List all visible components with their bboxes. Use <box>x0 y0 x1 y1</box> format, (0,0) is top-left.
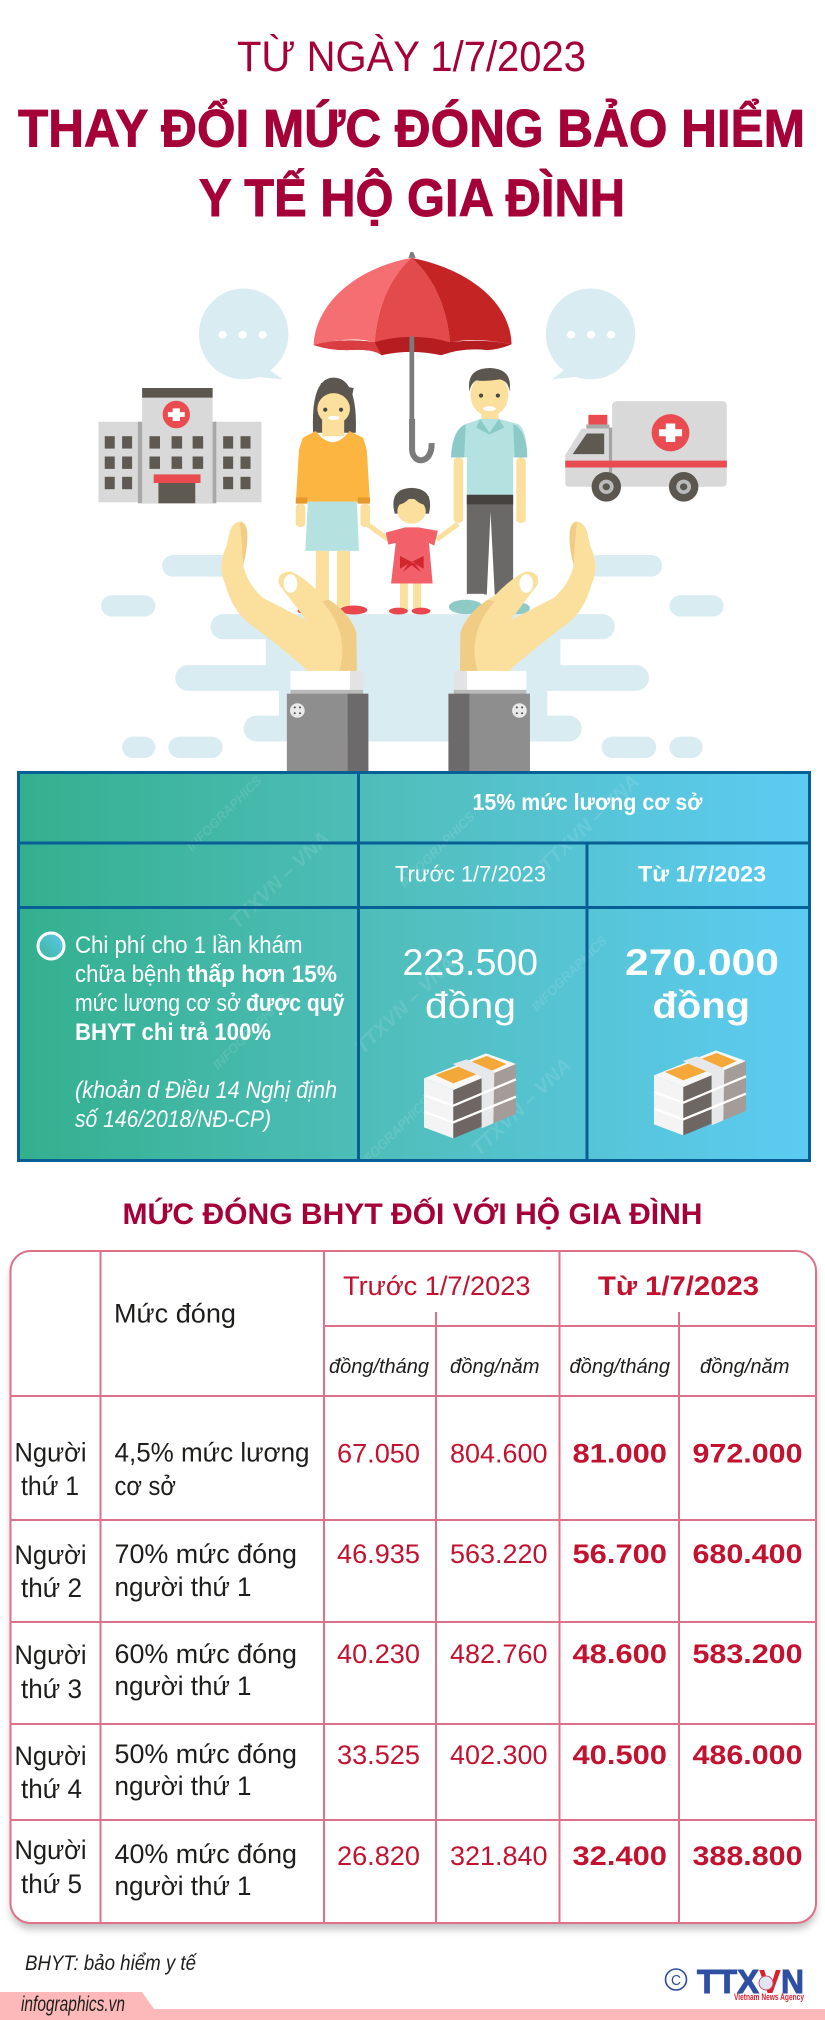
row: person 1: 81.000 <box>572 1438 667 1468</box>
row: person 5: thứ 5 <box>21 1869 82 1899</box>
row: person 4: 486.000 <box>692 1740 802 1770</box>
figure: man <box>449 368 530 614</box>
row: person 4: Người <box>14 1741 86 1771</box>
row: person 2: 56.700 <box>572 1539 667 1569</box>
column heading: 15% of base salary: 15% mức lương cơ sở <box>472 789 703 815</box>
row: person 1: 4,5% mức lương <box>114 1438 310 1468</box>
row: person 1: cơ sở <box>114 1471 176 1501</box>
row: person 2: 70% mức đóng <box>114 1539 297 1569</box>
footnote: BHYT: bảo hiểm y tế <box>25 1952 197 1975</box>
row: person 5: 32.400 <box>572 1841 667 1871</box>
row: person 3: 583.200 <box>692 1639 802 1669</box>
title: TỪ NGÀY 1/7/2023 <box>237 33 586 81</box>
row: person 5: 26.820 <box>337 1841 420 1871</box>
table header: Mức đóng <box>114 1298 236 1328</box>
text block: cost rule: chữa bệnh <box>75 961 181 988</box>
footer bar: infographics.vn <box>21 1993 125 2016</box>
value: 223.500 đồng: 223.500 <box>402 942 538 983</box>
value: 223.500 đồng <box>402 942 538 1026</box>
row: person 5: 321.840 <box>450 1841 548 1871</box>
text block: cost rule: Chi phí cho 1 lần khám <box>75 932 302 959</box>
row: person 2: người thứ 1 <box>114 1572 252 1602</box>
hand and sleeve: left <box>221 522 368 772</box>
column heading: before 1/7/2023: Trước 1/7/2023 <box>395 862 546 886</box>
logo: TTXVN: TTX <box>697 1963 759 2000</box>
row: person 4: thứ 4 <box>21 1774 82 1804</box>
panel: 15% base salary comparison table: TTXVN – VNA <box>467 1054 576 1161</box>
heading: household contribution: MỨC ĐÓNG BHYT ĐỐI VỚI HỘ GIA ĐÌNH <box>122 1197 702 1231</box>
panel: 15% base salary comparison table: INFOGRAPHICS <box>352 1094 433 1175</box>
title: Y TẾ HỘ GIA ĐÌNH <box>199 167 625 228</box>
row: person 5: 388.800 <box>692 1841 802 1871</box>
row: person 1: thứ 1 <box>21 1471 79 1501</box>
row: person 3: người thứ 1 <box>114 1671 252 1701</box>
row: person 3 <box>14 1639 802 1704</box>
text block: cost rule: số 146/2018/NĐ-CP) <box>75 1106 271 1133</box>
figure: child <box>367 488 458 614</box>
text block: cost rule: (khoản d Điều 14 Nghị định <box>75 1077 337 1104</box>
row: person 1 <box>14 1438 802 1501</box>
row: person 4: người thứ 1 <box>114 1771 252 1801</box>
column heading: from 1/7/2023: Từ 1/7/2023 <box>638 862 766 886</box>
row: person 1: 804.600 <box>450 1438 548 1468</box>
row: person 1: Người <box>14 1438 86 1468</box>
icon: umbrella <box>314 252 512 460</box>
value: 270.000 đồng: đồng <box>652 985 750 1026</box>
icon: ambulance <box>565 401 727 502</box>
row: person 4: 40.500 <box>572 1740 667 1770</box>
panel: 15% base salary comparison table: TTXVN – VNA <box>351 952 460 1059</box>
panel: 15% base salary comparison table: INFOGRAPHICS <box>184 773 265 854</box>
table header <box>114 1271 790 1378</box>
row: person 4 <box>14 1739 802 1804</box>
row: person 2: 563.220 <box>450 1539 548 1569</box>
row: person 5: Người <box>14 1835 86 1865</box>
row: person 4: 33.525 <box>337 1740 420 1770</box>
row: person 3: Người <box>14 1640 86 1670</box>
row: person 2: 680.400 <box>692 1539 802 1569</box>
logo: TTXVN: N <box>781 1963 804 2000</box>
row: person 4: 50% mức đóng <box>114 1739 297 1769</box>
row: person 2: 46.935 <box>337 1539 420 1569</box>
row: person 2: Người <box>14 1540 86 1570</box>
panel: 15% base salary comparison table: INFOGRAPHICS <box>397 809 478 890</box>
panel: 15% base salary comparison table: TTXVN – VNA <box>225 827 334 934</box>
figure: woman <box>296 378 370 614</box>
hand and sleeve: right <box>448 522 596 772</box>
row: person 3: 48.600 <box>572 1639 667 1669</box>
value: 223.500 đồng: đồng <box>425 985 516 1026</box>
logo: TTXVN <box>666 1963 804 2002</box>
row: person 5 <box>14 1835 802 1901</box>
illustration: family protected by umbrella and hands <box>98 252 727 772</box>
panel: 15% base salary comparison table: INFOGRAPHICS <box>529 933 610 1014</box>
icon: bullet circle <box>38 933 64 959</box>
table header: Trước 1/7/2023 <box>343 1271 530 1301</box>
icon: left speech bubble <box>199 289 288 379</box>
panel: 15% base salary comparison table: TTXVN – VNA <box>535 770 644 877</box>
row: person 3: 482.760 <box>450 1639 548 1669</box>
panel: contribution table <box>10 1251 816 1929</box>
row: person 2: thứ 2 <box>21 1573 82 1603</box>
background cloud shapes <box>101 555 724 758</box>
row: person 3: thứ 3 <box>21 1674 82 1704</box>
panel: 15% base salary comparison table <box>18 770 810 1175</box>
text block: cost rule: BHYT chi trả 100% <box>75 1019 271 1046</box>
table header: đồng/tháng <box>570 1356 670 1378</box>
row: person 1: 972.000 <box>692 1438 802 1468</box>
value: 270.000 đồng <box>625 942 779 1026</box>
row: person 3: 40.230 <box>337 1639 420 1669</box>
row: person 2 <box>14 1539 802 1603</box>
footer bar <box>0 1992 825 2020</box>
text block: cost rule: thấp hơn 15% <box>187 961 337 988</box>
icon: money stack before <box>424 1053 516 1138</box>
table header: Từ 1/7/2023 <box>598 1271 759 1301</box>
icon: hospital <box>98 388 262 503</box>
value: 270.000 đồng: 270.000 <box>625 942 779 983</box>
row: person 3: 60% mức đóng <box>114 1639 297 1669</box>
panel: 15% base salary comparison table: INFOGRAPHICS <box>210 991 291 1072</box>
icon: money stack from <box>654 1050 746 1135</box>
logo: TTXVN: C <box>671 1972 681 1989</box>
table header: đồng/năm <box>450 1356 540 1378</box>
row: person 5: 40% mức đóng <box>114 1839 297 1869</box>
icon: right speech bubble <box>546 289 635 379</box>
text block: cost rule <box>75 932 345 1133</box>
title <box>18 33 805 228</box>
logo: TTXVN: V <box>759 1963 781 2000</box>
table header: đồng/tháng <box>329 1356 429 1378</box>
row: person 4: 402.300 <box>450 1740 548 1770</box>
text block: cost rule: được quỹ <box>246 990 345 1017</box>
text block: cost rule: mức lương cơ sở <box>75 990 241 1017</box>
table header: đồng/năm <box>700 1356 790 1378</box>
row: person 1: 67.050 <box>337 1438 420 1468</box>
row: person 5: người thứ 1 <box>114 1871 252 1901</box>
